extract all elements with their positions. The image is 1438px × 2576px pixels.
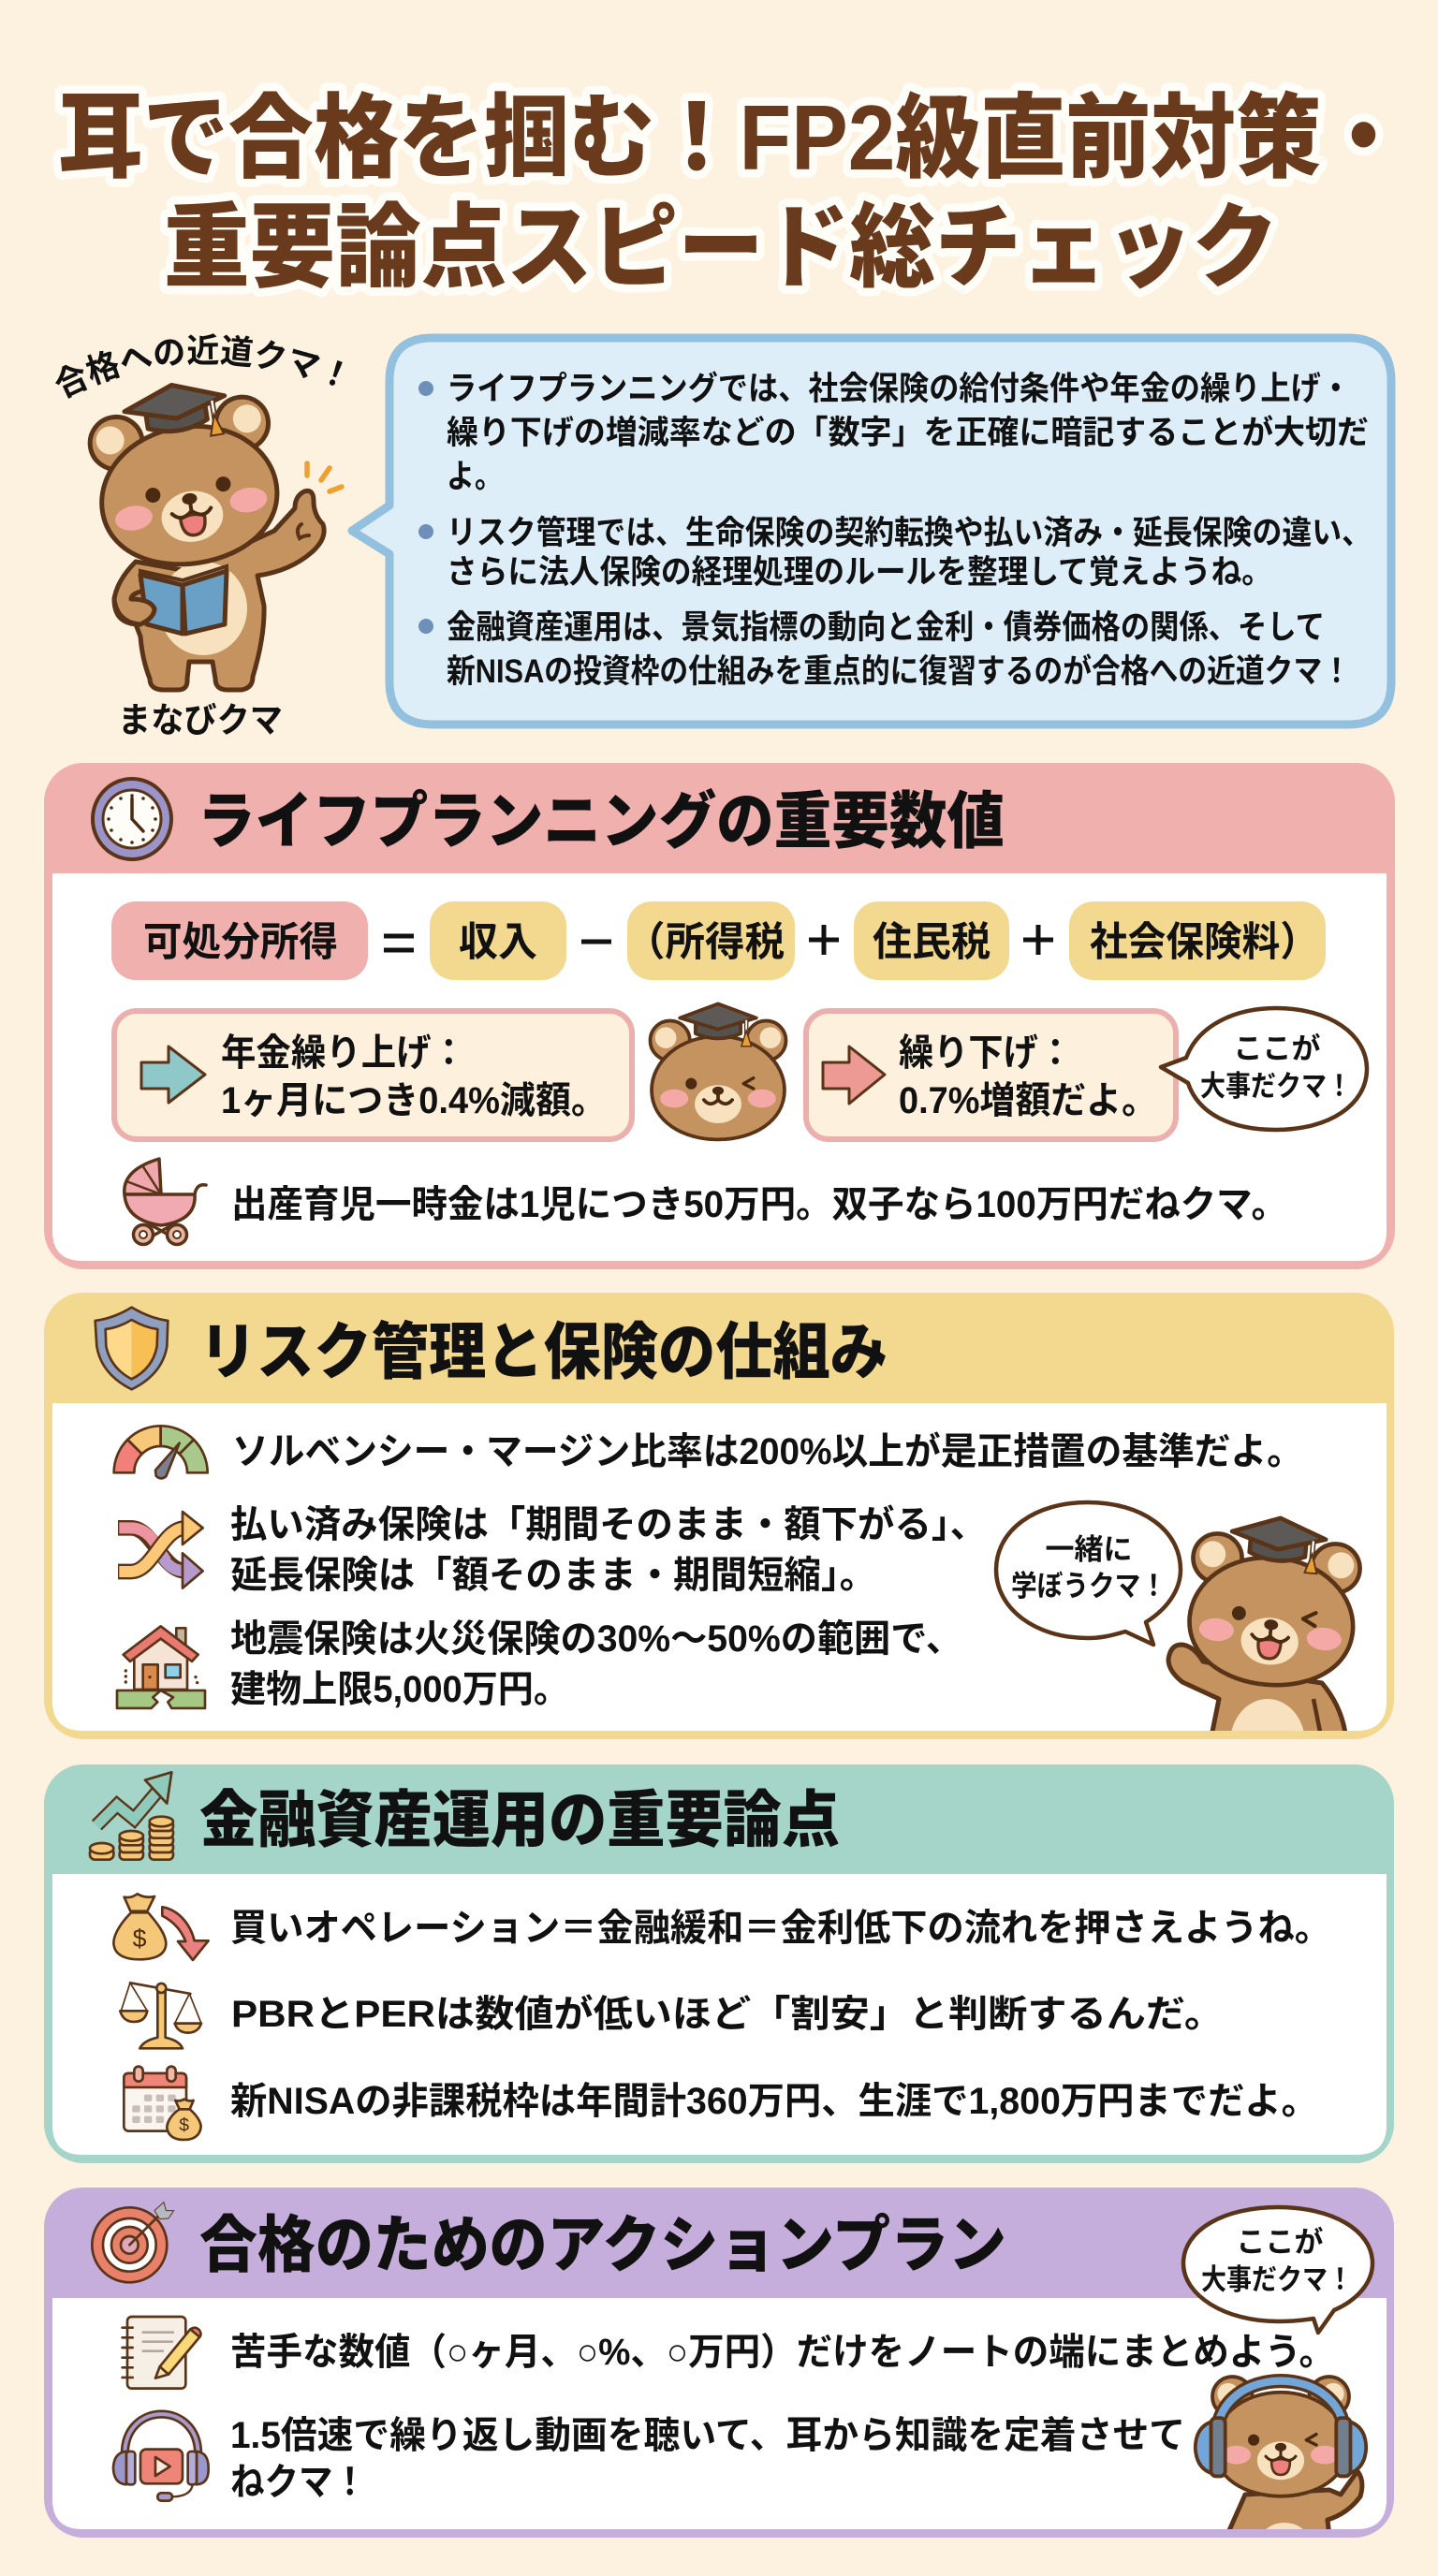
text: paid-up and extended insurance: 払い済み保険は「期間そのまま・額下がる」、 xyxy=(230,1504,987,1545)
formula row: （所得税 xyxy=(625,920,785,965)
bear head: winking xyxy=(651,1003,785,1139)
callout: deferred pension: 0.7%増額だよ。 xyxy=(899,1080,1157,1121)
text: earthquake insurance: 建物上限5,000万円。 xyxy=(230,1669,569,1710)
icon: target xyxy=(92,2203,174,2282)
text: childbirth lump sum: 出産育児一時金は1児につき50万円。双子なら100万円だねクマ。 xyxy=(231,1184,1287,1225)
panel: asset management xyxy=(44,1764,1394,2163)
speech bubble: important xyxy=(1161,1008,1367,1130)
speech bubble: study together: 学ぼうクマ！ xyxy=(1011,1570,1167,1603)
speech bubble: study together xyxy=(996,1502,1181,1645)
icon: headset with video xyxy=(113,2414,209,2501)
text: paid-up and extended insurance xyxy=(230,1504,987,1596)
icon: calendar with money bag xyxy=(124,2067,201,2140)
speech bubble: important: 大事だクマ！ xyxy=(1200,1070,1352,1103)
speech bubble: summary xyxy=(352,338,1391,724)
heading: 金融資産運用の重要論点 xyxy=(199,1785,840,1854)
formula row xyxy=(111,901,1326,980)
speech bubble: important xyxy=(1183,2207,1372,2333)
icon: house on cracked ground xyxy=(117,1626,205,1708)
icon: shield xyxy=(95,1308,168,1389)
mascot: studying bear xyxy=(82,371,342,690)
heading: ライフプランニングの重要数値 xyxy=(198,786,1005,856)
text: listen at 1.5x speed: ねクマ！ xyxy=(230,2462,367,2503)
icon: money bag with down arrow xyxy=(113,1894,209,1960)
text: paid-up and extended insurance: 延長保険は「額そのまま・期間短縮」。 xyxy=(230,1555,876,1596)
panel: risk management xyxy=(44,1293,1394,1787)
icon: stroller xyxy=(125,1159,206,1245)
formula row: 可処分所得 xyxy=(143,920,338,965)
mascot: waving bear xyxy=(1167,1516,1362,1731)
text: buying operation: 買いオペレーション＝金融緩和＝金利低下の流れを押さえようね。 xyxy=(230,1908,1331,1949)
text: listen at 1.5x speed: 1.5倍速で繰り返し動画を聴いて、耳から知識を定着させて xyxy=(230,2415,1185,2456)
icon: balance scale xyxy=(120,1983,201,2048)
speech bubble: summary: リスク管理では、生命保険の契約転換や払い済み・延長保険の違い、 xyxy=(447,515,1372,551)
callout: early pension: 年金繰り上げ： xyxy=(221,1032,466,1074)
speech bubble: summary: さらに法人保険の経理処理のルールを整理して覚えようね。 xyxy=(447,554,1272,591)
speech bubble: summary: よ。 xyxy=(447,459,503,495)
speech bubble: important: ここが xyxy=(1234,1032,1320,1065)
panel: action plan xyxy=(44,2188,1394,2560)
text: earthquake insurance: 地震保険は火災保険の30%～50%の範囲で、 xyxy=(230,1618,962,1660)
text: earthquake insurance xyxy=(230,1618,962,1710)
callout: early pension: 1ヶ月につき0.4%減額。 xyxy=(221,1080,607,1121)
callout: deferred pension xyxy=(806,1011,1176,1139)
text: weak numbers note: 苦手な数値（○ヶ月、○%、○万円）だけをノートの端にまとめよう。 xyxy=(230,2332,1335,2373)
mascot: headphones bear xyxy=(1193,2374,1369,2529)
text: solvency margin: ソルベンシー・マージン比率は200%以上が是正措置の基準だよ。 xyxy=(232,1431,1303,1472)
icon: notebook and pencil xyxy=(123,2317,201,2389)
icon: clock xyxy=(93,779,171,859)
formula row: 社会保険料） xyxy=(1090,920,1318,965)
speech bubble: summary: 金融資産運用は、景気指標の動向と金利・債券価格の関係、そして xyxy=(447,609,1325,646)
title xyxy=(58,86,1406,299)
text: new NISA: 新NISAの非課税枠は年間計360万円、生涯で1,800万円までだよ。 xyxy=(230,2081,1318,2122)
icon: money bag with down arrow: $ xyxy=(133,1925,147,1953)
text: listen at 1.5x speed xyxy=(230,2415,1185,2503)
speech bubble: important: 大事だクマ！ xyxy=(1201,2263,1353,2296)
heading: 合格のためのアクションプラン xyxy=(199,2210,1006,2279)
mascot name: まなびクマ xyxy=(118,701,283,739)
icon: crossing arrows xyxy=(118,1512,203,1588)
icon: gauge xyxy=(114,1426,208,1478)
heading: リスク管理と保険の仕組み xyxy=(199,1317,888,1386)
callout: deferred pension: 繰り下げ： xyxy=(899,1032,1073,1074)
speech bubble: important: ここが xyxy=(1236,2226,1324,2259)
icon: calendar with money bag: $ xyxy=(179,2116,189,2136)
speech bubble: study together: 一緒に xyxy=(1045,1533,1133,1566)
icon: rising arrow and coins xyxy=(90,1772,173,1860)
mascot caption: arc text: 合格への近道クマ！ xyxy=(55,333,343,399)
formula row: 収入 xyxy=(459,920,537,965)
title: 重要論点スピード総チェック xyxy=(164,196,1278,299)
speech bubble: summary: ライフプランニングでは、社会保険の給付条件や年金の繰り上げ・ xyxy=(447,371,1351,407)
formula row: 住民税 xyxy=(873,920,990,965)
text: PBR and PER: PBRとPERは数値が低いほど「割安」と判断するんだ。 xyxy=(231,1994,1224,2035)
callout: early pension xyxy=(114,1011,632,1139)
speech bubble: summary: 繰り下げの増減率などの「数字」を正確に暗記することが大切だ xyxy=(447,415,1369,451)
panel: life planning xyxy=(44,763,1395,1269)
